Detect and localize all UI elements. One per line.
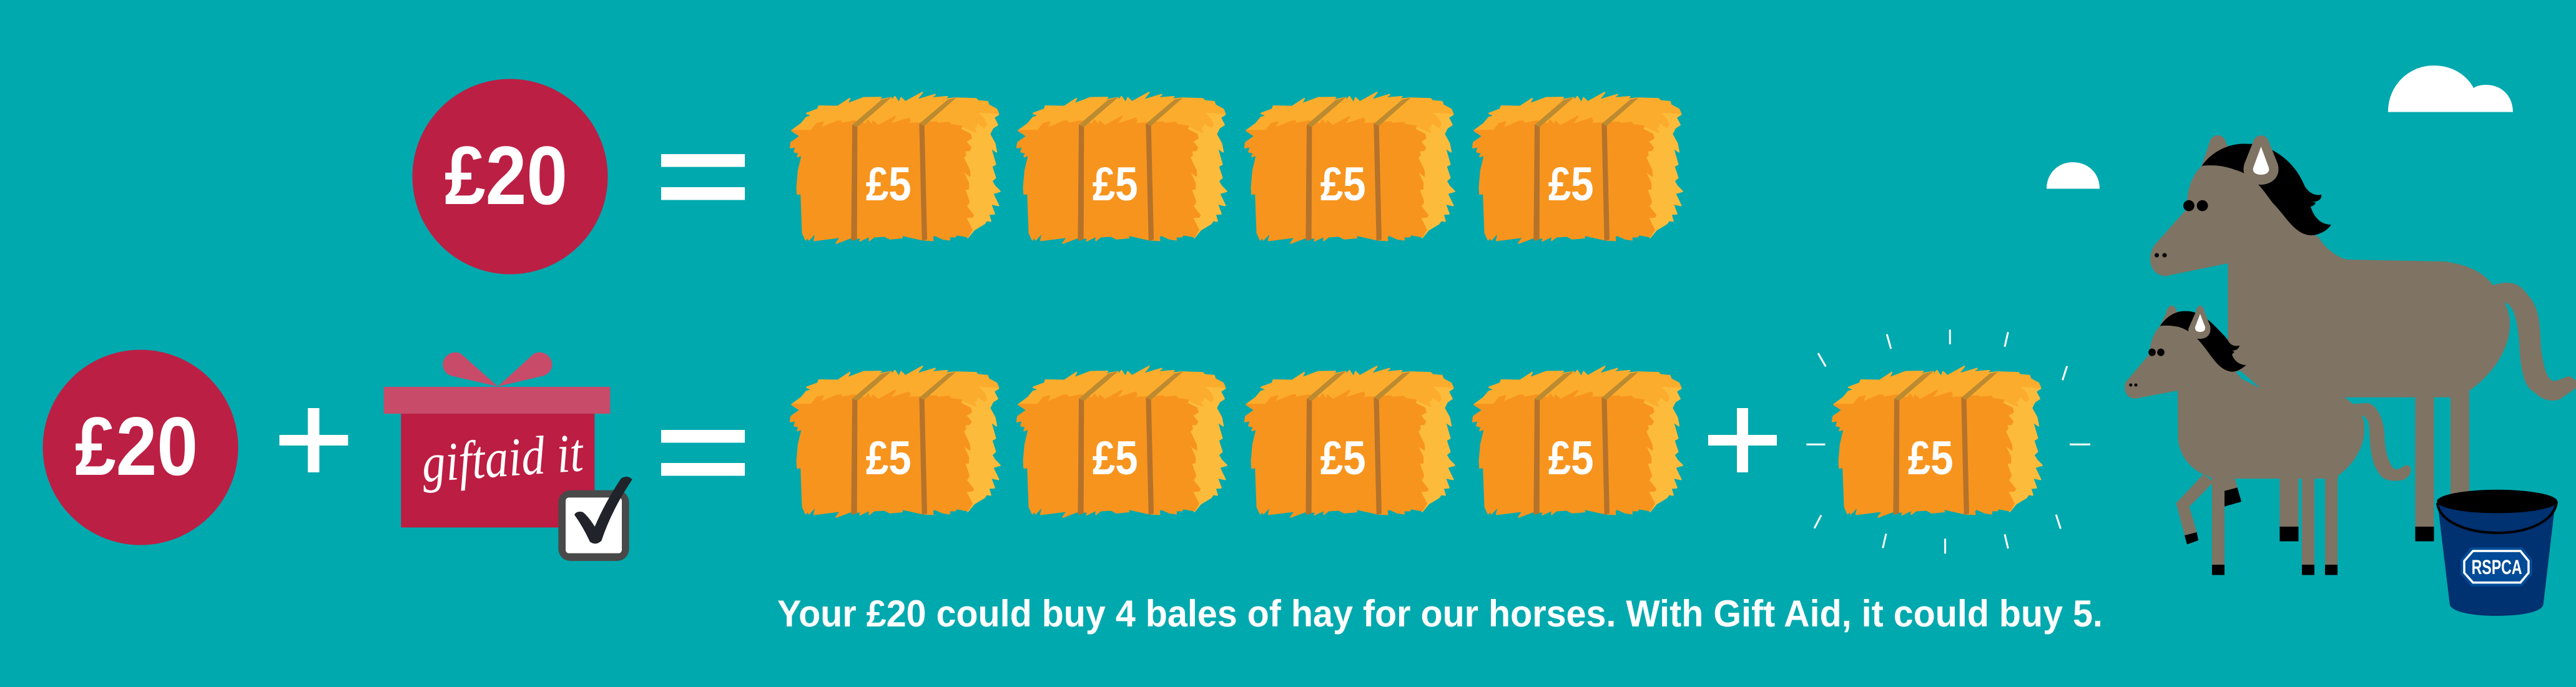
cloud: small [2047, 162, 2100, 188]
bottom row: equals sign [661, 430, 745, 475]
bonus hay bale with sparkle: £5 [1908, 432, 1954, 485]
top row: hay bale 4: £5 [1548, 158, 1594, 211]
top row: hay bale 3: £5 [1320, 158, 1366, 211]
adult horse mane [2201, 144, 2331, 235]
cloud: large [2388, 66, 2513, 112]
bucket rim opening [2437, 490, 2557, 513]
foal ear [2188, 306, 2210, 339]
bottom row: hay bale 4 [1473, 366, 1683, 517]
bucket handle [2437, 502, 2557, 533]
foal hooves [2185, 487, 2338, 575]
icon: gift aid box with tick [384, 353, 632, 561]
top row: hay bale 4 [1473, 92, 1683, 243]
bottom row: hay bale 2 [1017, 366, 1227, 517]
bottom row: hay bale 1 [790, 366, 1000, 517]
top row: equals sign [661, 154, 745, 200]
adult horse hooves [2279, 527, 2434, 542]
adult horse eyes [2183, 200, 2208, 211]
bucket body [2437, 502, 2555, 616]
gift lid [384, 387, 610, 414]
bonus hay bale with sparkle [1806, 329, 2090, 553]
foal mane [2160, 311, 2246, 372]
foal back ear [2160, 306, 2180, 326]
foal legs [2176, 474, 2338, 565]
RSPCA logo: RSPCA [2472, 556, 2522, 578]
adult horse back ear [2201, 135, 2231, 166]
gift box [401, 414, 594, 527]
top row: hay bale 1 [790, 92, 1000, 243]
plus sign before bonus bale [1708, 408, 1777, 472]
foal body with tail [2125, 318, 2411, 481]
RSPCA logo [2460, 547, 2532, 587]
caption: Your £20 could buy 4 bales of hay for our horses. With Gift Aid, it could buy 5. [777, 593, 2103, 635]
bottom row: £20 circle [42, 349, 238, 545]
foal eyes [2148, 349, 2165, 356]
illustration: adult horse [2150, 135, 2576, 542]
icon: RSPCA bucket [2437, 490, 2557, 616]
adult horse nostrils [2155, 253, 2166, 257]
bottom row: hay bale 3: £5 [1320, 432, 1366, 485]
teal gap between foal neck and adult chest [2236, 371, 2261, 388]
foal ear drop [2195, 314, 2205, 332]
bottom row: hay bale 4: £5 [1548, 432, 1594, 485]
top row: hay bale 2: £5 [1093, 158, 1138, 211]
bottom row: hay bale 2: £5 [1093, 432, 1138, 485]
bottom row: hay bale 3 [1245, 366, 1455, 517]
top row: hay bale 1: £5 [866, 158, 912, 211]
gift aid logo text: giftaid it [420, 422, 586, 494]
gift bow [443, 353, 552, 386]
illustration: foal [2125, 306, 2411, 575]
foal nostrils [2129, 383, 2138, 387]
top row: hay bale 2 [1017, 92, 1227, 243]
adult horse ear [2244, 135, 2278, 185]
bottom row: hay bale 1: £5 [866, 432, 912, 485]
bottom row: £20 circle: £20 [75, 401, 198, 493]
top row: £20 circle [412, 79, 608, 275]
adult horse ear drop [2253, 147, 2269, 175]
checkbox [558, 477, 632, 561]
plus sign [280, 408, 348, 472]
adult horse legs [2279, 387, 2469, 527]
adult horse body with tail [2150, 159, 2576, 401]
top row: hay bale 3 [1245, 92, 1455, 243]
top row: £20 circle: £20 [445, 130, 568, 222]
